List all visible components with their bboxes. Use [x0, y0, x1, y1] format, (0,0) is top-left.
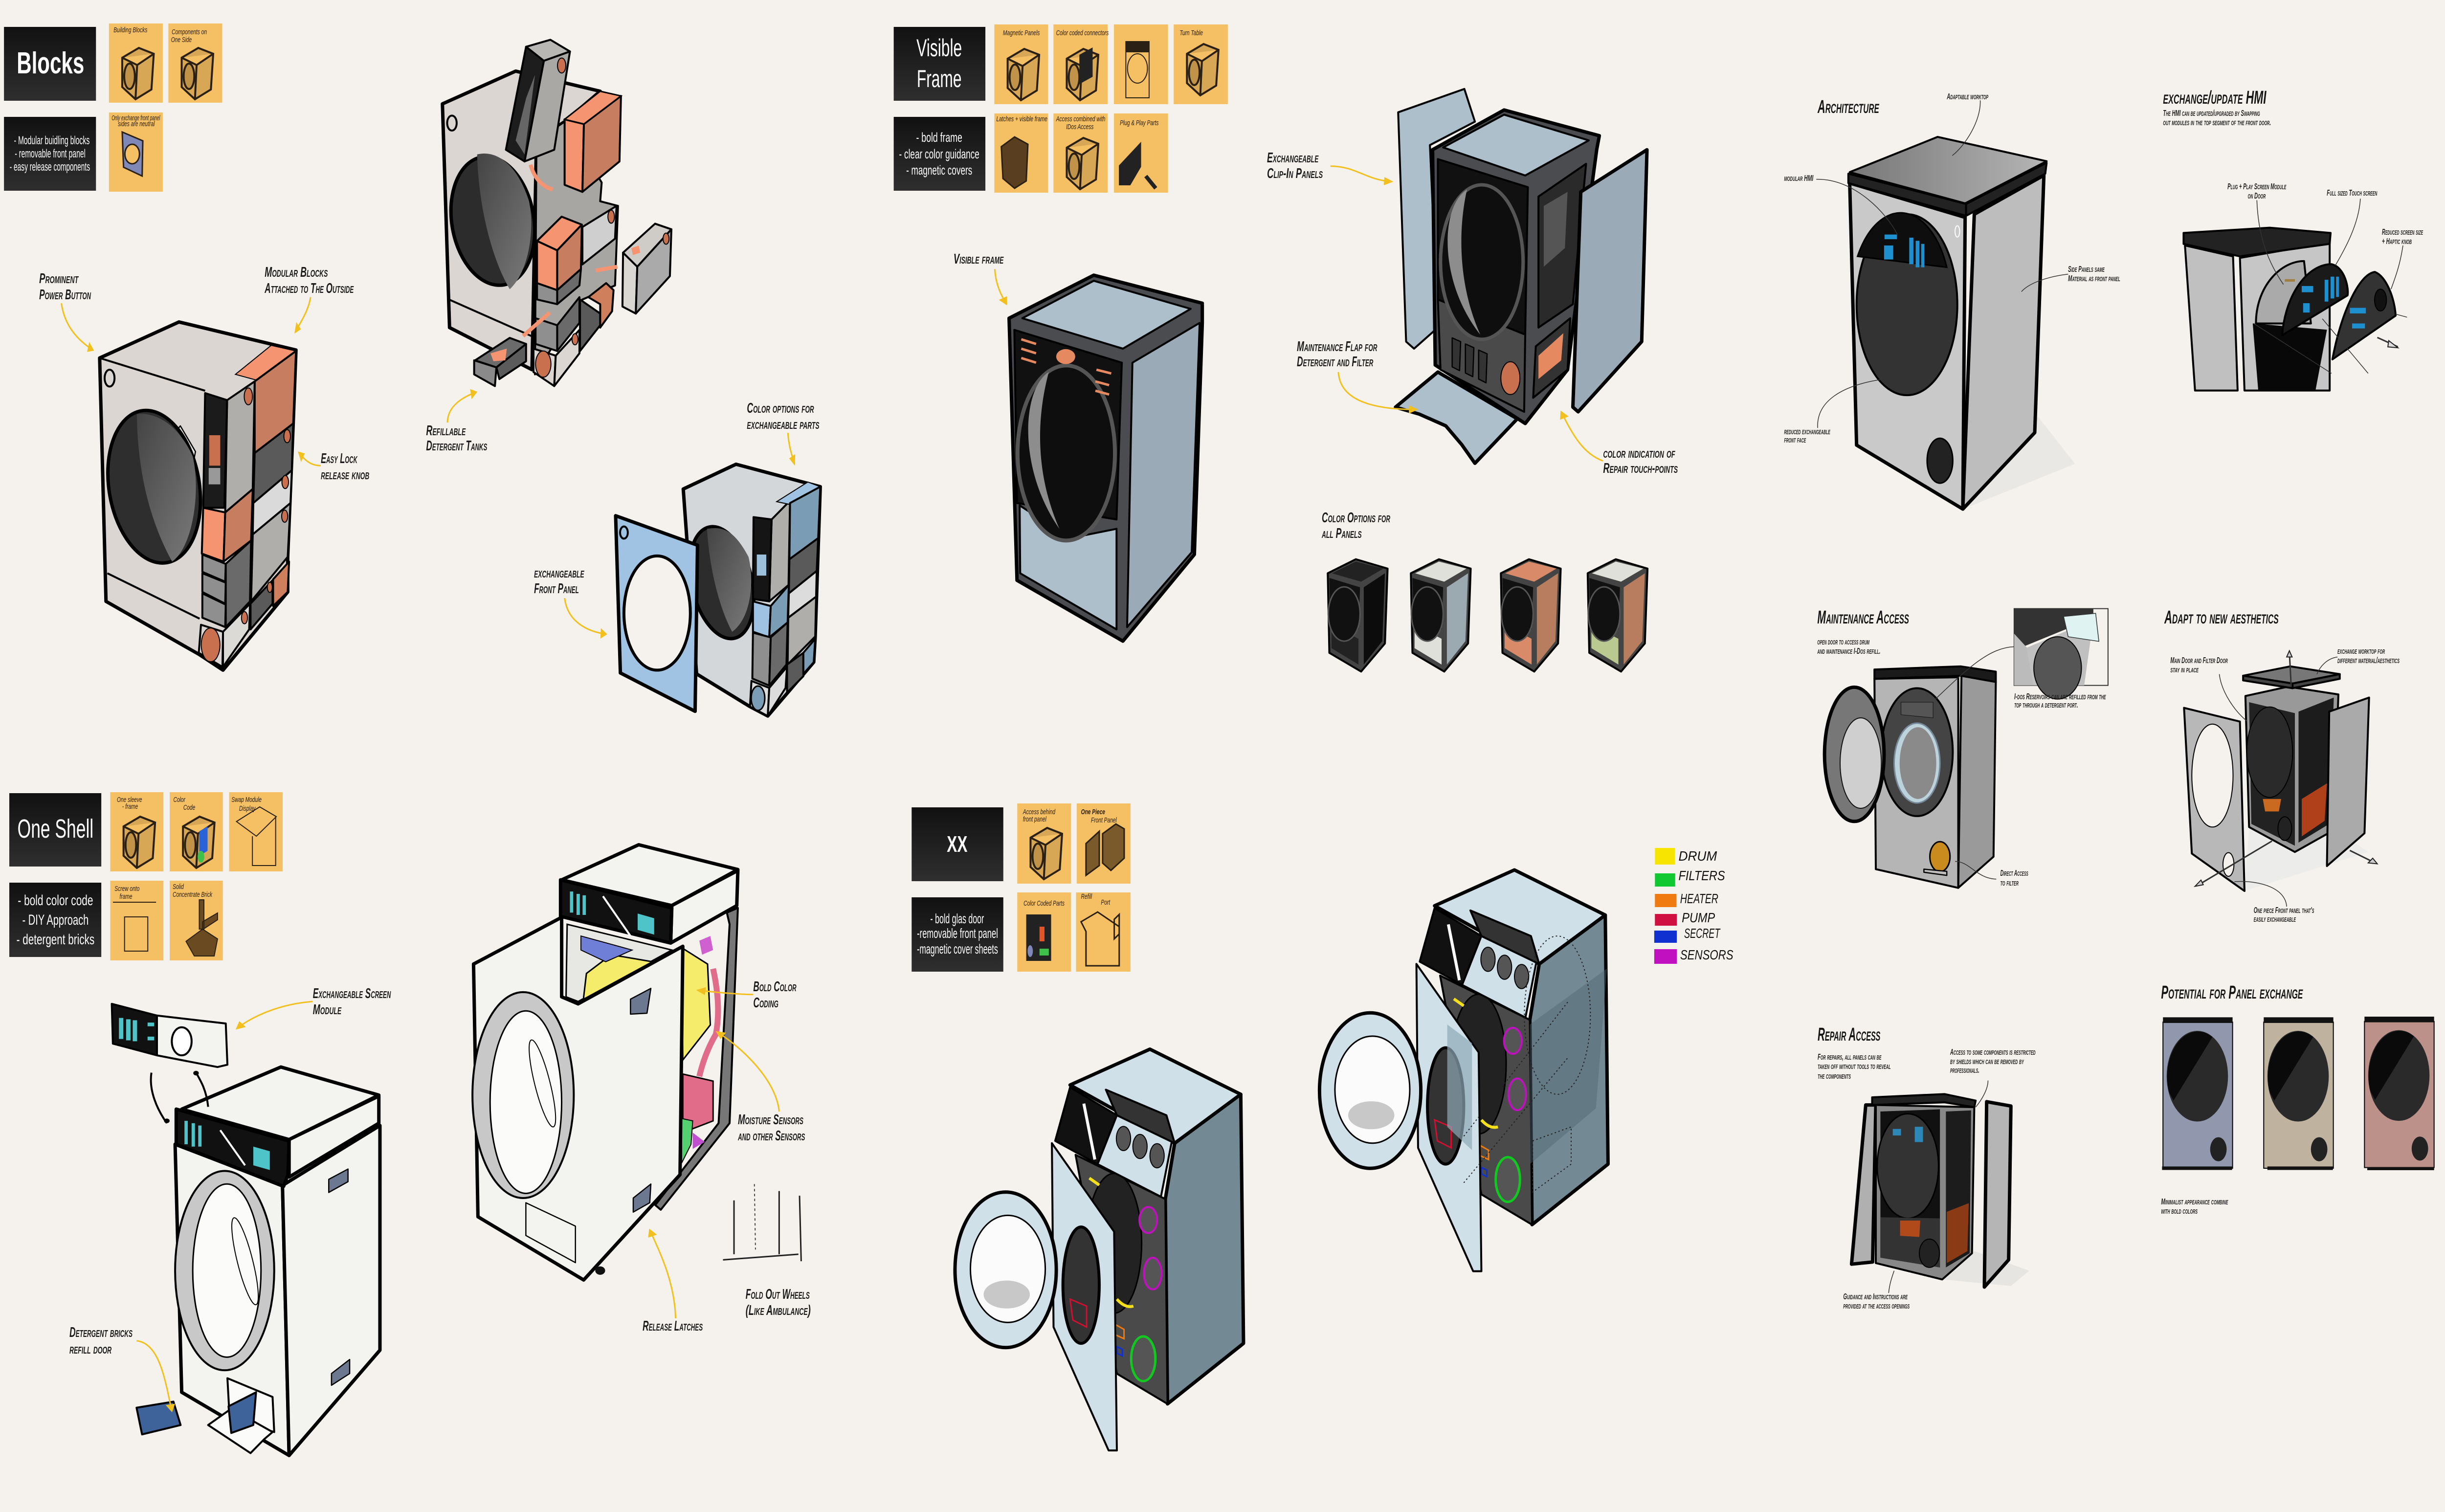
- sketch thumbnails: Visible Frame: Magnetic Panels: [1003, 28, 1040, 37]
- arrows: blocks callouts: [62, 297, 321, 466]
- callouts: maintenance, adapt, repair, exchange: One piece Front panel that's: [2254, 906, 2314, 915]
- callouts: maintenance, adapt, repair, exchange: Potential for Panel exchange: [2161, 982, 2303, 1002]
- option: black: [1328, 559, 1388, 671]
- text block: XX features: - bold glas door: [930, 911, 984, 927]
- leaders: architecture: [1816, 100, 2068, 428]
- panel: Blocks concept: [4, 23, 820, 716]
- sketch thumbnails: Visible Frame: IDos Access: [1066, 122, 1094, 131]
- callouts: blocks dryer: Attached to The Outside: [265, 281, 354, 296]
- illustration: visible frame dryer: [1009, 275, 1202, 641]
- sketch thumbnails: One Shell: One sleeve: [117, 795, 142, 804]
- panel: Architecture and HMI: [1784, 87, 2423, 509]
- callouts: maintenance, adapt, repair, exchange: I-dos Reservoirs can are refilled from the: [2014, 692, 2106, 702]
- callouts: visible frame: Exchangeable: [1267, 150, 1319, 166]
- sketch thumbnails: Blocks: One Side: [171, 35, 192, 44]
- callouts: one shell: and other Sensors: [737, 1128, 805, 1144]
- callouts: architecture and HMI: Plug + Play Screen Module: [2227, 182, 2287, 192]
- callouts: visible frame: Maintenance Flap for: [1297, 339, 1378, 355]
- callouts: one shell: Detergent bricks: [69, 1325, 133, 1340]
- callouts: exploded blocks: exchangeable: [534, 565, 584, 581]
- callouts: architecture and HMI: Reduced screen size: [2382, 227, 2423, 237]
- callouts: maintenance, adapt, repair, exchange: Direct Access: [2000, 868, 2028, 878]
- arrows: one shell callouts: [136, 990, 779, 1411]
- legend: colour coding: HEATER: [1680, 891, 1718, 907]
- sketch thumbnails: One Shell: Color: [174, 795, 185, 804]
- sketch thumbnails: One Shell: Code: [183, 803, 195, 812]
- panel: Visible Frame concept: [894, 24, 1678, 671]
- text block: Visible Frame features: - magnetic covers: [906, 162, 972, 178]
- sketch thumbnails: One Shell: Swap Module: [231, 795, 262, 804]
- illustration: maintenance access dryer: [1824, 667, 1996, 888]
- legend: colour coding: FILTERS: [1678, 868, 1725, 884]
- sketch thumbnails: One Shell: Concentrate Brick: [173, 890, 213, 899]
- illustration: visible frame exploded: [1396, 89, 1647, 463]
- sketch thumbnails: Visible Frame: Latches + visible frame: [996, 114, 1047, 123]
- text block: One Shell features: - detergent bricks: [17, 932, 94, 948]
- callouts: visible frame: Color Options for: [1322, 510, 1390, 526]
- text block: Blocks features: - removable front panel: [15, 147, 86, 160]
- sketch thumbnails: XX: [1017, 803, 1131, 972]
- text block: One Shell features: - DIY Approach: [22, 912, 89, 928]
- callouts: maintenance, adapt, repair, exchange: For repairs, all panels can be: [1818, 1052, 1882, 1062]
- callouts: maintenance, adapt, repair, exchange: with bold colors: [2161, 1206, 2198, 1216]
- callouts: visible frame: Repair touch-points: [1603, 461, 1678, 476]
- callouts: maintenance, adapt, repair, exchange: Access to some components is restricted: [1950, 1047, 2036, 1057]
- text block: Blocks features: - easy release components: [10, 160, 90, 174]
- sketch thumbnails: XX: Front Panel: [1091, 816, 1117, 824]
- sketch thumbnails: Visible Frame: Color coded connectors: [1056, 28, 1109, 37]
- callouts: visible frame: Clip-In Panels: [1267, 166, 1323, 181]
- callouts: one shell: Coding: [753, 995, 778, 1011]
- sketch thumbnails: One Shell: Solid: [173, 882, 184, 891]
- callouts: blocks dryer: release knob: [321, 467, 369, 483]
- title box: Blocks: Blocks: [17, 46, 84, 80]
- sketch thumbnails: Blocks: Only exchange front panel: [111, 113, 160, 122]
- illustration: panel exchange colour options: [2162, 1017, 2434, 1170]
- sketch thumbnails: XX: Refill: [1081, 892, 1092, 901]
- callouts: exploded blocks: [426, 400, 820, 597]
- callouts: visible frame: [954, 150, 1678, 541]
- panel: XX concept: [911, 803, 1734, 1450]
- callouts: architecture and HMI: [1784, 87, 2423, 445]
- callouts: architecture and HMI: modular HMI: [1784, 174, 1814, 183]
- illustration: blocks dryer: [89, 322, 296, 670]
- callouts: maintenance, adapt, repair, exchange: Main Door and Filter Door: [2170, 656, 2228, 666]
- callouts: architecture and HMI: front face: [1784, 435, 1806, 445]
- callouts: blocks dryer: Easy Lock: [321, 451, 358, 467]
- leaders: maintenance and adapt: [1935, 646, 2337, 907]
- callouts: architecture and HMI: Side Panels same: [2068, 265, 2105, 274]
- sketch thumbnails: XX: Color Coded Parts: [1023, 899, 1065, 908]
- inset: detergent port: [2014, 609, 2108, 699]
- arrows: visible frame callouts: [995, 166, 1603, 461]
- callouts: one shell: [69, 979, 811, 1357]
- callouts: maintenance, adapt, repair, exchange: Repair Access: [1818, 1024, 1881, 1045]
- title box: Visible Frame: Visible: [916, 35, 962, 62]
- sketch thumbnails: One Shell: Display: [239, 804, 256, 813]
- callouts: architecture and HMI: exchange/update HMI: [2163, 87, 2267, 108]
- callouts: architecture and HMI: Architecture: [1817, 96, 1879, 117]
- sketch thumbnails: One Shell: - frame: [122, 802, 138, 811]
- callouts: maintenance, adapt, repair, exchange: Guidance and Instructions are: [1843, 1292, 1908, 1302]
- callouts: maintenance, adapt, repair, exchange: top through a detergent port.: [2014, 700, 2078, 710]
- title box: Visible Frame: [894, 27, 985, 101]
- callouts: blocks dryer: Modular Blocks: [265, 265, 328, 280]
- callouts: maintenance, adapt, repair, exchange: different material/aesthetics: [2337, 656, 2400, 666]
- callouts: visible frame: color indication of: [1603, 445, 1675, 461]
- callouts: exploded blocks: Color options for: [747, 400, 814, 416]
- text block: XX features: [911, 897, 1003, 972]
- illustration: one shell open: [472, 845, 738, 1280]
- leaders: HMI: [2257, 199, 2403, 289]
- callouts: maintenance, adapt, repair, exchange: to filter: [2000, 878, 2019, 888]
- text block: Visible Frame features: [894, 117, 985, 191]
- callouts: architecture and HMI: The HMI can be updated/upgraded by Swapping: [2163, 109, 2260, 118]
- legend: colour coding: DRUM: [1678, 848, 1717, 864]
- text block: Visible Frame features: - bold frame: [916, 130, 962, 145]
- callouts: architecture and HMI: + Haptic knob: [2382, 237, 2412, 246]
- text block: XX features: -magnetic cover sheets: [917, 941, 998, 957]
- callouts: architecture and HMI: reduced exchangeable: [1784, 427, 1830, 437]
- sketch thumbnails: Visible Frame: [994, 24, 1228, 193]
- callouts: one shell: Fold Out Wheels: [746, 1287, 810, 1302]
- callouts: maintenance, adapt, repair, exchange: Maintenance Access: [1817, 607, 1909, 627]
- legend: colour coding: SENSORS: [1680, 947, 1734, 963]
- option: white and grey: [1411, 559, 1471, 671]
- illustration: one shell dryer: [136, 1067, 380, 1455]
- illustration: exchange HMI dryer: [2183, 228, 2407, 391]
- callouts: one shell: refill door: [69, 1341, 112, 1357]
- sketch thumbnails: Visible Frame: Access combined with: [1056, 114, 1105, 123]
- arrows: exploded callouts: [447, 392, 795, 634]
- callouts: one shell: Bold Color: [753, 979, 797, 995]
- text block: XX features: -removable front panel: [917, 926, 998, 941]
- option: terracotta: [1501, 559, 1561, 671]
- callouts: blocks dryer: Power Button: [39, 287, 91, 303]
- callouts: maintenance, adapt, repair, exchange: the components: [1818, 1071, 1851, 1081]
- callouts: maintenance, adapt, repair, exchange: Adapt to new aesthetics: [2164, 607, 2279, 627]
- callouts: one shell: Release Latches: [643, 1318, 703, 1334]
- option: green and terracotta: [1588, 559, 1647, 671]
- panel option: blue grey: [2162, 1017, 2233, 1170]
- callouts: maintenance, adapt, repair, exchange: provided at the access openings: [1843, 1301, 1910, 1311]
- callouts: maintenance, adapt, repair, exchange: by shields which can be removed by: [1950, 1057, 2024, 1067]
- text block: Visible Frame features: - clear color guidance: [899, 146, 979, 161]
- callouts: maintenance, adapt, repair, exchange: professionals.: [1950, 1066, 1979, 1075]
- panel option: beige: [2264, 1017, 2334, 1170]
- callouts: one shell: (Like Ambulance): [746, 1303, 811, 1318]
- illustration: xx dryer open door: [955, 1049, 1244, 1450]
- panel: Maintenance, adapt, repair and panel exchange: [1817, 607, 2434, 1311]
- callouts: architecture and HMI: Material as front panel: [2068, 274, 2120, 284]
- illustration: architecture dryer: [1848, 137, 2075, 509]
- callouts: exploded blocks: Detergent Tanks: [426, 438, 488, 454]
- callouts: blocks dryer: Prominent: [39, 271, 79, 287]
- callouts: maintenance, adapt, repair, exchange: open door to access drum: [1817, 637, 1870, 647]
- illustration: exploded blocks dryer: [434, 40, 671, 386]
- leaders: repair: [1889, 1081, 1988, 1293]
- sketch thumbnails: Blocks: [109, 23, 222, 192]
- callouts: architecture and HMI: Adaptable worktop: [1947, 92, 1989, 102]
- title box: XX: XX: [947, 832, 967, 857]
- sketch thumbnails: XX: Port: [1101, 898, 1110, 907]
- callouts: maintenance, adapt, repair, exchange: [1817, 607, 2400, 1311]
- illustration: blocks dryer with exchangeable blue panel: [616, 464, 820, 716]
- callouts: maintenance, adapt, repair, exchange: exchange worktop for: [2337, 646, 2385, 656]
- illustration: repair access: [1851, 1094, 2029, 1287]
- sketch thumbnails: Blocks: sides are neutral: [118, 119, 155, 128]
- callouts: one shell: Module: [313, 1002, 342, 1018]
- title box: One Shell: One Shell: [18, 814, 93, 844]
- callouts: maintenance, adapt, repair, exchange: Minimalist appearance combine: [2161, 1197, 2228, 1207]
- callouts: blocks dryer: [39, 265, 369, 483]
- callouts: exploded blocks: Refillable: [426, 423, 466, 439]
- text block: One Shell features: [9, 883, 101, 957]
- sketch thumbnails: Blocks: Components on: [172, 27, 207, 36]
- sketch thumbnails: One Shell: frame: [119, 892, 133, 901]
- callouts: maintenance, adapt, repair, exchange: easily exchangeable: [2254, 914, 2296, 924]
- callouts: exploded blocks: exchangeable parts: [747, 417, 820, 432]
- sketch thumbnails: XX: Access behind: [1022, 807, 1056, 816]
- sketch thumbnails: XX: One Piece: [1081, 807, 1105, 816]
- illustration: color options for all panels: [1328, 559, 1647, 671]
- callouts: maintenance, adapt, repair, exchange: and maintenance I-Dos refill.: [1817, 646, 1880, 656]
- sketch thumbnails: Blocks: Building Blocks: [113, 25, 148, 34]
- panel: One Shell concept: [9, 792, 811, 1455]
- title box: Visible Frame: Frame: [917, 66, 962, 93]
- sketch: fold out wheels: [723, 1184, 801, 1261]
- illustration: adapt to new aesthetics exploded: [2184, 651, 2378, 891]
- text block: One Shell features: - bold color code: [18, 892, 93, 909]
- text block: Blocks features: - Modular buidling blocks: [14, 134, 89, 147]
- text block: Blocks features: [4, 117, 96, 191]
- callouts: one shell: Exchangeable Screen: [313, 986, 391, 1001]
- callouts: visible frame: Visible frame: [954, 251, 1004, 267]
- callouts: architecture and HMI: out modules in the top segment of the front door.: [2163, 118, 2271, 128]
- panel option: dusty rose: [2364, 1017, 2434, 1170]
- callouts: visible frame: all Panels: [1321, 526, 1362, 541]
- legend: colour coding: [1654, 848, 1734, 964]
- sketch thumbnails: One Shell: [110, 792, 283, 960]
- title box: Blocks: [4, 27, 96, 101]
- sketch thumbnails: XX: front panel: [1023, 815, 1047, 823]
- module: exchangeable screen: [112, 1004, 227, 1123]
- callouts: architecture and HMI: Full sized Touch screen: [2327, 188, 2378, 198]
- title box: XX: [911, 807, 1003, 881]
- legend: colour coding: SECRET: [1684, 926, 1721, 941]
- sketch thumbnails: Visible Frame: Plug & Play Parts: [1120, 118, 1159, 127]
- callouts: maintenance, adapt, repair, exchange: taken off without tools to reveal: [1818, 1062, 1891, 1071]
- callouts: architecture and HMI: on Door: [2248, 191, 2266, 201]
- title box: One Shell: [9, 793, 101, 867]
- sketch thumbnails: One Shell: Screw onto: [114, 884, 139, 893]
- legend: colour coding: PUMP: [1682, 910, 1715, 926]
- callouts: maintenance, adapt, repair, exchange: stay in place: [2170, 665, 2199, 675]
- illustration: xx dryer with see-through components: [1319, 870, 1608, 1271]
- sketch thumbnails: Visible Frame: Turn Table: [1179, 28, 1203, 37]
- callouts: exploded blocks: Front Panel: [534, 581, 579, 597]
- callouts: visible frame: Detergent and Filter: [1297, 354, 1374, 370]
- callouts: one shell: Moisture Sensors: [738, 1112, 803, 1128]
